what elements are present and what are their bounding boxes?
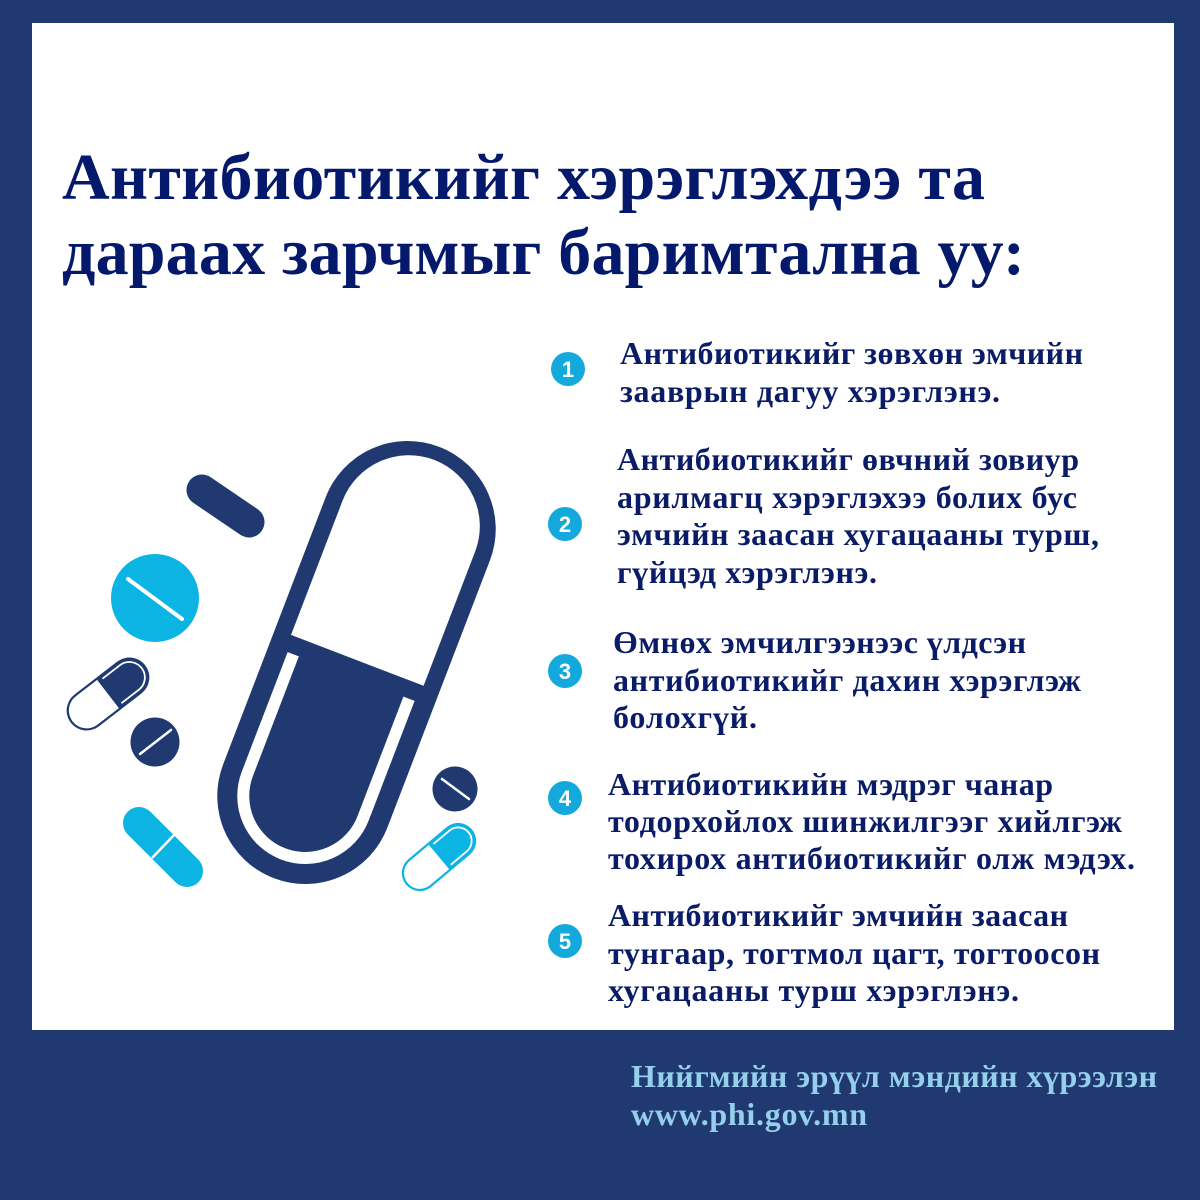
- text 4: Антибиотикийн мэдрэг чанар: [608, 766, 1053, 802]
- number badge 4: 4: [559, 786, 572, 811]
- text 3: [613, 624, 1082, 735]
- list item 3: [548, 624, 1082, 735]
- icon: navy tablet bar: [202, 490, 249, 522]
- icon: large capsule: [192, 415, 521, 910]
- list item 1: [551, 335, 1083, 409]
- text 2: гүйцэд хэрэглэнэ.: [617, 554, 877, 590]
- text 3: антибиотикийг дахин хэрэглэж: [613, 662, 1082, 698]
- text 2: [617, 441, 1099, 590]
- icon: navy round tablet left: [130, 718, 180, 766]
- text 2: Антибиотикийг өвчний зовиур: [617, 441, 1079, 477]
- icon: outlined cyan capsule: [394, 816, 484, 898]
- text 4: [608, 766, 1135, 876]
- footer: organisation and website: [631, 1058, 1157, 1132]
- text 3: Өмнөх эмчилгээнээс үлдсэн: [613, 624, 1026, 660]
- text 3: болохгүй.: [613, 699, 757, 735]
- list item 2: [548, 441, 1099, 590]
- icon: solid cyan capsule: [139, 823, 187, 871]
- number badge 4: [548, 781, 582, 815]
- text 1: зааврын дагуу хэрэглэнэ.: [620, 373, 1000, 409]
- footer: organisation and website: www.phi.gov.mn: [631, 1096, 867, 1132]
- title: Антибиотикийг хэрэглэхдээ та: [62, 141, 985, 214]
- number badge 2: 2: [559, 512, 571, 537]
- text 5: Антибиотикийг эмчийн заасан: [608, 897, 1068, 933]
- icon: navy round tablet right: [432, 766, 478, 812]
- list item 4: [548, 766, 1135, 876]
- number badge 1: [551, 352, 585, 386]
- number badge 1: 1: [562, 357, 574, 382]
- text 2: эмчийн заасан хугацааны турш,: [617, 516, 1099, 552]
- text 1: Антибиотикийг зөвхөн эмчийн: [620, 335, 1083, 371]
- white content panel: [32, 23, 1174, 1030]
- number badge 5: [548, 924, 582, 958]
- illustration: pills and capsules: [59, 415, 521, 910]
- number badge 3: 3: [559, 659, 571, 684]
- text 1: [620, 335, 1083, 409]
- icon: large cyan round tablet: [111, 554, 199, 642]
- number badge 2: [548, 507, 582, 541]
- title: дараах зарчмыг баримтална уу:: [62, 216, 1025, 289]
- number badge 5: 5: [559, 929, 571, 954]
- text 5: тунгаар, тогтмол цагт, тогтоосон: [608, 935, 1100, 971]
- number badge 3: [548, 654, 582, 688]
- title: [62, 141, 1025, 289]
- text 5: хугацааны турш хэрэглэнэ.: [608, 972, 1019, 1008]
- list item 5: [548, 897, 1100, 1008]
- text 2: арилмагц хэрэглэхээ болих бус: [617, 479, 1077, 515]
- text 4: тодорхойлох шинжилгээг хийлгэж: [608, 803, 1123, 839]
- icon: outlined navy capsule: [59, 649, 157, 739]
- text 5: [608, 897, 1100, 1008]
- footer: organisation and website: Нийгмийн эрүүл мэндийн хүрээлэн: [631, 1058, 1157, 1094]
- text 4: тохирох антибиотикийг олж мэдэх.: [608, 840, 1135, 876]
